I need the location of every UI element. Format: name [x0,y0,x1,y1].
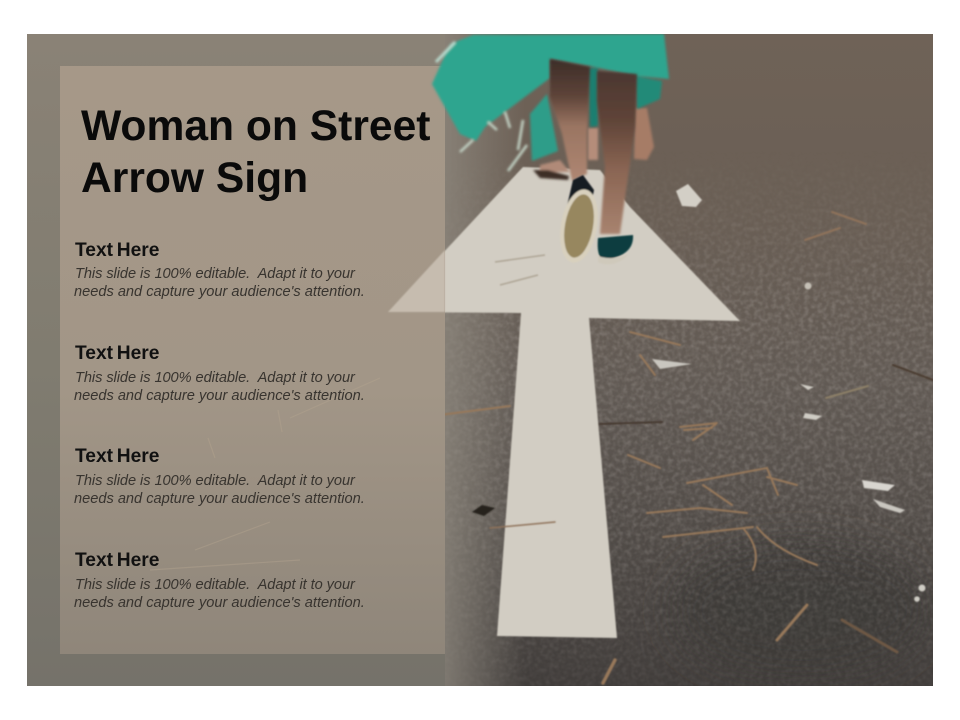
panel: translucent text background [60,66,445,654]
icon: street arrow [445,166,740,639]
woman: teal skirt [432,34,669,171]
text block 2 [74,342,365,404]
woman: far leg and foot [533,108,654,180]
text block 2: needs and capture your audience's attention. [74,388,365,404]
left tint strip [27,34,445,686]
title: Woman on Street [81,102,430,150]
text block 3: Text Here [75,446,159,466]
text block 3 [74,446,365,507]
paint flecks and straw on road [432,184,933,683]
text block 1: needs and capture your audience's attention. [74,284,365,300]
woman: legs [550,59,637,234]
woman: shoes [563,174,634,260]
text block 1 [74,240,365,300]
text block 4: needs and capture your audience's attention. [74,595,365,611]
text block 2: Text Here [75,342,159,364]
title [81,102,430,202]
text block 4: This slide is 100% editable. Adapt it to your [75,577,355,593]
title: Arrow Sign [81,154,308,202]
text block 3: This slide is 100% editable. Adapt it to your [75,473,355,489]
text block 2: This slide is 100% editable. Adapt it to your [75,370,355,386]
text block 3: needs and capture your audience's attention. [74,491,365,507]
text block 1: This slide is 100% editable. Adapt it to your [75,266,355,282]
text block 1: Text Here [75,240,159,260]
text block 4: Text Here [75,550,159,570]
text block 4 [74,550,365,611]
